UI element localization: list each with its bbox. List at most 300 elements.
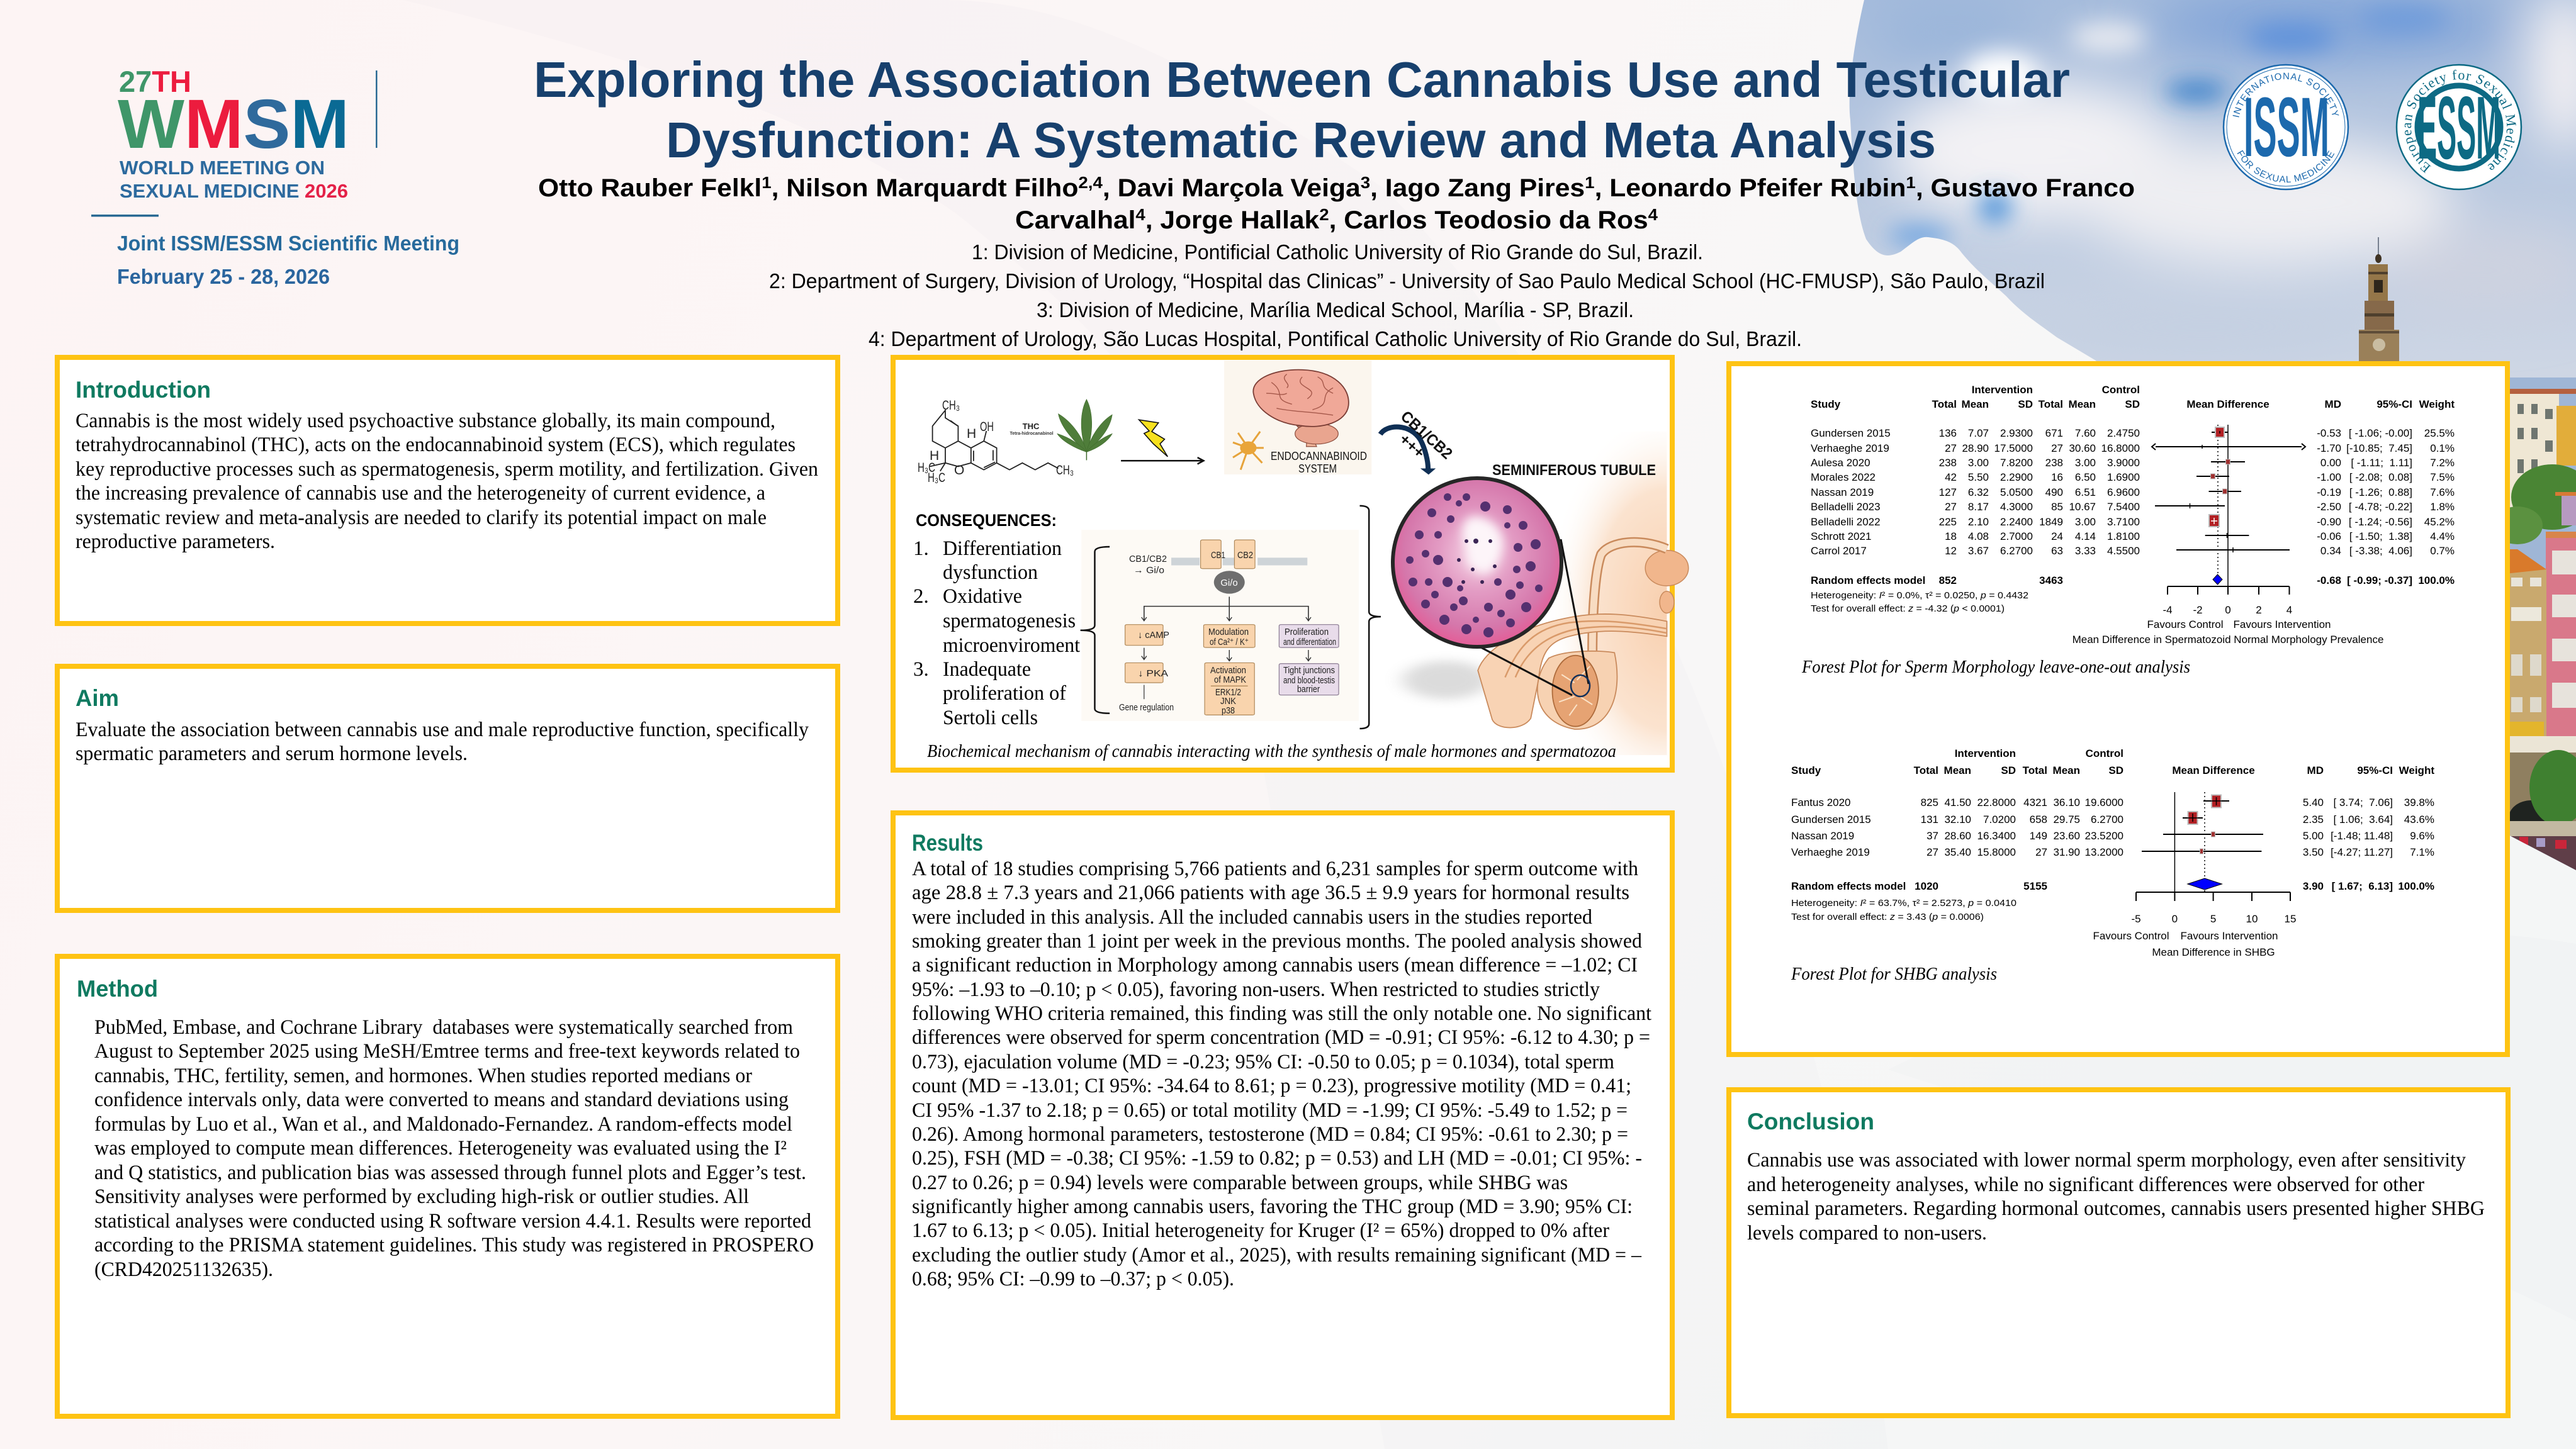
random effects summary: 100.0%	[2418, 574, 2455, 586]
table rows: [ 3.74; 7.06]	[2333, 797, 2393, 808]
THC label: THC	[1023, 422, 1040, 431]
table header: Mean	[2069, 398, 2096, 410]
micrograph: seminiferous tubule	[1393, 478, 1561, 647]
table rows: 30.60	[2069, 442, 2096, 454]
table rows: 2.4750	[2107, 427, 2140, 439]
THC label: Tetra-hidrocanabinol	[1010, 432, 1054, 436]
text block: method: according to the PRISMA statement guidelines. This study was registered in PROSPERO	[94, 1234, 814, 1256]
table rows: 17.5000	[1994, 442, 2033, 454]
text block: aim: spermatic parameters and serum hormone levels.	[76, 742, 468, 765]
text block: results: count (MD = -13.01; CI 95%: -34.64 to 8.61; p = 0.23), progressive motility (MD = 0.41;	[912, 1075, 1631, 1097]
signalling diagram: and differentiation	[1283, 637, 1336, 647]
table rows: 37	[1926, 830, 1938, 842]
text block: introduction: Cannabis is the most widely used psychoactive substance globally, its main compound,	[76, 410, 775, 432]
text block: results: 0.26). Among hormonal parameters, testosterone (MD = 0.84; CI 95%: -0.61 to 2.30; p =	[912, 1123, 1628, 1146]
table rows: 41.50	[1944, 797, 1971, 808]
panel: aim	[57, 666, 838, 910]
authors: 4	[1648, 205, 1658, 224]
signalling diagram: Proliferation	[1285, 627, 1329, 637]
table rows: 27	[2035, 846, 2047, 858]
authors: , Jorge Hallak	[1145, 206, 1320, 234]
table rows: 149	[2030, 830, 2047, 842]
signalling diagram: of MAPK	[1214, 674, 1246, 685]
arrow: CB1/CB2 curved: +++	[1396, 430, 1428, 462]
table rows: [ -1.26; 0.88]	[2349, 486, 2412, 498]
background photo: clock tower	[2359, 237, 2399, 361]
axis labels: Favours Intervention	[2181, 930, 2278, 942]
heading: introduction: Introduction	[76, 377, 211, 403]
table rows: 3.9000	[2107, 457, 2140, 469]
table rows: Morales 2022	[1811, 471, 1876, 483]
text block: results: 0.68; 95% CI: –0.99 to –0.37; p < 0.05).	[912, 1268, 1234, 1290]
table rows: Verhaeghe 2019	[1811, 442, 1889, 454]
table rows: 12	[1945, 545, 1957, 557]
table rows: 8.17	[1968, 501, 1989, 513]
table rows: 238	[2045, 457, 2063, 469]
table rows: 3.33	[2075, 545, 2096, 557]
text block: results: CI 95% -1.37 to 2.18; p = 0.65) or total motility (MD = -1.99; CI 95%: -5.49 to 1.52; p =	[912, 1099, 1628, 1122]
list: consequences: Differentiation	[943, 537, 1062, 560]
logo: ISSM: INTERNATIONAL SOCIETY	[2233, 73, 2339, 117]
table rows: 131	[1921, 814, 1938, 825]
axis labels: 2	[2256, 604, 2262, 616]
table rows: 4.5500	[2107, 545, 2140, 557]
table rows: 42	[1945, 471, 1957, 483]
arrow: CB1/CB2 curved	[1380, 408, 1456, 474]
random effects summary	[1811, 574, 2455, 586]
logo: ESSM: European Society for Sexual Medicine	[2404, 69, 2516, 174]
signalling diagram: CB1/CB2	[1129, 554, 1167, 564]
text block: results: significantly higher among cannabis users, favoring the THC group (MD = 3.90; 95% CI:	[912, 1195, 1633, 1218]
list: consequences: Sertoli cells	[943, 707, 1038, 729]
table header: Total	[2023, 764, 2047, 776]
table header: Mean	[2053, 764, 2080, 776]
table rows: 6.50	[2075, 471, 2096, 483]
text block: results: smoking greater than 1 joint per week in the previous months. The pooled analysis showed	[912, 930, 1642, 953]
random effects summary: -0.68	[2317, 574, 2341, 586]
text block: introduction: tetrahydrocannabinol (THC), acts on the endocannabinoid system (ECS), which regulates	[76, 434, 796, 456]
table header: 95%-CI	[2376, 398, 2412, 410]
text block: introduction	[76, 410, 818, 553]
table header: Mean Difference	[2186, 398, 2269, 410]
signalling diagram: Tight junctions	[1283, 665, 1335, 676]
table rows: 7.5400	[2107, 501, 2140, 513]
heading: method: Method	[77, 976, 158, 1002]
axis labels: 0	[2172, 913, 2178, 925]
table rows: 3.00	[1968, 457, 1989, 469]
list: consequences: dysfunction	[943, 561, 1038, 584]
random effects summary: 3.90	[2303, 880, 2324, 892]
random effects summary: 852	[1939, 574, 1957, 586]
table rows: 2.35	[2303, 814, 2324, 825]
table rows: [ 1.06; 3.64]	[2333, 814, 2393, 825]
table rows: 238	[1939, 457, 1957, 469]
table rows: [ -1.06; -0.00]	[2349, 427, 2412, 439]
logo: sexual medicine 2026: SEXUAL MEDICINE 2026	[120, 180, 348, 202]
table header: Control	[2086, 747, 2123, 759]
table header: Total	[1932, 398, 1957, 410]
text block: conclusion: Cannabis use was associated with lower normal sperm morphology, even after sensitivity	[1747, 1149, 2466, 1172]
chart: forest plot SHBG	[1791, 747, 2434, 958]
text block: conclusion	[1747, 1149, 2485, 1245]
table header: Control	[2102, 384, 2140, 396]
list: consequences: Inadequate	[943, 658, 1031, 681]
authors: 1	[1906, 173, 1916, 192]
list: consequences: 1.	[913, 537, 929, 560]
axis labels: Mean Difference in SHBG	[2152, 946, 2275, 958]
panel: results	[893, 813, 1672, 1418]
text block: method: Sensitivity analyses were performed by excluding high-risk or outlier studies. All	[94, 1185, 749, 1208]
text block: conclusion: and heterogeneity analyses, while no significant differences were observed for other	[1747, 1173, 2424, 1196]
table rows: 27	[1945, 442, 1957, 454]
random effects summary: [ 1.67; 6.13]	[2332, 880, 2393, 892]
table rows: 45.2%	[2424, 516, 2455, 528]
table rows: [-4.27; 11.27]	[2331, 846, 2393, 858]
logo: WMSM wordmark: WMSM	[118, 86, 349, 163]
table rows: 0.1%	[2430, 442, 2455, 454]
text block: results: following WHO criteria remained, this finding was still the only notable one. No significant	[912, 1002, 1651, 1025]
table rows: 7.0200	[1983, 814, 2016, 825]
text block: method: statistical analyses were conducted using R software version 4.4.1. Results were reported	[94, 1210, 811, 1233]
table rows: [-10.85; 7.45]	[2346, 442, 2412, 454]
table rows: 7.6%	[2430, 486, 2455, 498]
text block: results: 0.73), ejaculation volume (MD = -0.23; 95% CI: -0.50 to 0.05; p = 0.1034), total sperm	[912, 1051, 1614, 1073]
table rows: 15.8000	[1977, 846, 2016, 858]
table rows: -1.70	[2317, 442, 2341, 454]
signalling diagram	[1081, 506, 1381, 729]
table rows: 16	[2051, 471, 2063, 483]
arrow: CB1/CB2 curved: CB1/CB2	[1397, 408, 1456, 462]
icon: lightning bolt	[1139, 420, 1167, 457]
authors: Otto Rauber Felkl	[538, 174, 748, 202]
table header: 95%-CI	[2357, 764, 2393, 776]
text block: results: were included in this analysis. All the included cannabis users in the studies reported	[912, 906, 1592, 929]
affiliations: 3: Division of Medicine, Marília Medical School, Marília - SP, Brazil.	[1037, 298, 1634, 322]
axis labels: Favours Intervention	[2234, 618, 2331, 630]
table rows: -0.53	[2317, 427, 2341, 439]
table rows: Schrott 2021	[1811, 530, 1871, 542]
table rows: 7.07	[1968, 427, 1989, 439]
background photo: Porto buildings	[2510, 378, 2576, 870]
text block: method: PubMed, Embase, and Cochrane Library databases were systematically searched from	[94, 1016, 793, 1039]
table rows: 6.32	[1968, 486, 1989, 498]
table rows: 2.2400	[2000, 516, 2033, 528]
icon: THC molecule: H	[967, 427, 976, 441]
table rows: 5.0500	[2000, 486, 2033, 498]
table rows: [-1.48; 11.48]	[2331, 830, 2393, 842]
table rows: 32.10	[1944, 814, 1971, 825]
table rows: 6.2700	[2000, 545, 2033, 557]
panel: method	[57, 956, 838, 1416]
text block: method: August to September 2025 using MeSH/Emtree terms and free-text keywords related to	[94, 1040, 800, 1063]
text block: results: 0.25), FSH (MD = -0.38; CI 95%: -1.59 to 0.82; p = 0.53) and LH (MD = -0.01; CI 95%: -	[912, 1147, 1642, 1170]
random effects summary: [ -0.99; -0.37]	[2347, 574, 2412, 586]
icon: THC molecule: O	[954, 463, 964, 478]
list: consequences	[913, 537, 1080, 729]
table rows: Nassan 2019	[1791, 830, 1854, 842]
table header: MD	[2325, 398, 2341, 410]
list: consequences: microenviroment	[943, 634, 1080, 657]
icon: THC molecule: H	[930, 449, 939, 463]
signalling diagram: barrier	[1297, 684, 1320, 695]
table header: SD	[2001, 764, 2016, 776]
table header: Total	[2039, 398, 2063, 410]
table rows: 3.67	[1968, 545, 1989, 557]
table rows: 1.8100	[2107, 530, 2140, 542]
icon: THC molecule: H₃C	[928, 471, 945, 485]
signalling diagram: ↓ cAMP	[1138, 630, 1169, 641]
table rows: 27	[1945, 501, 1957, 513]
signalling diagram: Activation	[1210, 665, 1246, 676]
axis labels: -4	[2163, 604, 2173, 616]
table rows: 127	[1939, 486, 1957, 498]
signalling diagram: p38	[1222, 705, 1235, 716]
signalling diagram: ERK1/2	[1215, 687, 1241, 698]
table header	[1811, 384, 2455, 410]
text block: method: formulas by Luo et al., Wan et al., and Maldonado-Fernandez. A random-effects model	[94, 1113, 792, 1136]
icon: THC molecule	[918, 398, 1074, 485]
axis labels: -5	[2131, 913, 2141, 925]
icon: brain and neuron: SYSTEM	[1298, 462, 1337, 475]
text block: results: differences were observed for sperm concentration (MD = -0.91; CI 95%: -6.12 to 4.30; p =	[912, 1026, 1650, 1049]
table rows: 85	[2051, 501, 2063, 513]
table rows: [ -1.11; 1.11]	[2351, 457, 2412, 469]
heading: consequences: CONSEQUENCES:	[916, 511, 1057, 530]
table rows: -2.50	[2317, 501, 2341, 513]
table rows: 9.6%	[2410, 830, 2434, 842]
table rows: 6.9600	[2107, 486, 2140, 498]
heterogeneity statistics	[1811, 590, 2028, 614]
logo: rule	[91, 215, 159, 216]
text block: method: was employed to compute mean differences. Heterogeneity was evaluated using the I²	[94, 1137, 787, 1160]
axis labels: Mean Difference in Spermatozoid Normal Morphology Prevalence	[2073, 634, 2383, 646]
table rows	[1791, 797, 2434, 858]
plot marks	[2152, 425, 2305, 595]
table rows: 23.5200	[2085, 830, 2123, 842]
table rows: -0.90	[2317, 516, 2341, 528]
list: consequences: 3.	[913, 658, 929, 681]
table rows: Verhaeghe 2019	[1791, 846, 1870, 858]
table rows: 7.2%	[2430, 457, 2455, 469]
table header	[1791, 747, 2434, 776]
table header: SD	[2018, 398, 2033, 410]
table rows: 4.3000	[2000, 501, 2033, 513]
authors: , Carlos Teodosio da Ros	[1329, 206, 1648, 234]
table header: Intervention	[1972, 384, 2033, 396]
table rows: 3.50	[2303, 846, 2324, 858]
table rows: 2.9300	[2000, 427, 2033, 439]
title	[534, 52, 2070, 168]
table rows: 490	[2045, 486, 2063, 498]
text block: method: (CRD420251132635).	[94, 1258, 273, 1281]
axis labels: Favours Control	[2093, 930, 2169, 942]
table rows: 1.8%	[2430, 501, 2455, 513]
table rows: 35.40	[1944, 846, 1971, 858]
heterogeneity statistics: Heterogeneity: I² = 0.0%, τ² = 0.0250, p = 0.4432	[1811, 590, 2028, 601]
signalling diagram: CB1	[1211, 550, 1225, 561]
axis labels	[2093, 913, 2296, 958]
illustration: testis anatomy	[1402, 432, 1689, 755]
heterogeneity statistics: Test for overall effect: z = 3.43 ( p = 0.0006)	[1791, 912, 1984, 922]
logo: 27TH: 27TH	[119, 65, 191, 98]
table header: SD	[2108, 764, 2123, 776]
table rows: 0.00	[2320, 457, 2341, 469]
table rows: 5.50	[1968, 471, 1989, 483]
list: consequences: Oxidative	[943, 585, 1022, 608]
table rows: Carrol 2017	[1811, 545, 1867, 557]
chart: forest plot sperm morphology	[1811, 384, 2455, 646]
authors: 1	[1585, 173, 1595, 192]
authors: 3	[1361, 173, 1370, 192]
caption: sperm morphology plot: Forest Plot for Sperm Morphology leave-one-out analysis	[1801, 657, 2190, 677]
joint meeting line: Joint ISSM/ESSM Scientific Meeting	[117, 232, 459, 255]
table rows: 27	[2051, 442, 2063, 454]
table rows: Belladelli 2022	[1811, 516, 1881, 528]
table rows: 4321	[2023, 797, 2047, 808]
logo: divider	[376, 70, 378, 148]
text block: aim	[76, 719, 809, 765]
axis labels: 4	[2286, 604, 2292, 616]
table rows: [ -2.08; 0.08]	[2349, 471, 2412, 483]
table rows: 25.5%	[2424, 427, 2455, 439]
text block: results: A total of 18 studies comprising 5,766 patients and 6,231 samples for sperm outcome with	[912, 858, 1638, 880]
table rows: 5.40	[2303, 797, 2324, 808]
caption: SHBG plot: Forest Plot for SHBG analysis	[1791, 964, 1997, 984]
table rows: 23.60	[2053, 830, 2080, 842]
table rows: 43.6%	[2404, 814, 2434, 825]
table rows: Gundersen 2015	[1811, 427, 1891, 439]
caption: mechanism figure: Biochemical mechanism of cannabis interacting with the synthesis of male hormones and spermatozoa	[927, 741, 1616, 761]
table rows: 2.2900	[2000, 471, 2033, 483]
table header: SD	[2125, 398, 2140, 410]
panel: forest plots	[1729, 364, 2507, 1055]
table header: Study	[1811, 398, 1841, 410]
signalling diagram: → Gi/o	[1133, 565, 1164, 576]
text block: introduction: key reproductive processes such as spermatogenesis, sperm motility, and fertilization. Given	[76, 458, 818, 481]
authors: , Iago Zang Pires	[1370, 174, 1585, 202]
icon: brain and neuron	[1224, 361, 1371, 475]
table rows: 3.7100	[2107, 516, 2140, 528]
authors: Carvalhal	[1015, 206, 1128, 234]
meeting date: February 25 - 28, 2026	[117, 265, 330, 288]
text block: method: cannabis, THC, fertility, semen, and hormones. When studies reported medians or	[94, 1065, 752, 1087]
table rows: 1.6900	[2107, 471, 2140, 483]
authors	[538, 173, 2135, 234]
table rows: 16.3400	[1977, 830, 2016, 842]
table rows: 22.8000	[1977, 797, 2016, 808]
table rows: -0.19	[2317, 486, 2341, 498]
heterogeneity statistics	[1791, 898, 2016, 922]
table header: Study	[1791, 764, 1821, 776]
authors: 2,4	[1078, 173, 1103, 192]
heading: aim: Aim	[76, 685, 119, 711]
heterogeneity statistics: Heterogeneity: I² = 63.7%, τ² = 2.5273, p = 0.0410	[1791, 898, 2016, 909]
authors: , Nilson Marquardt Filho	[772, 174, 1078, 202]
table header: Weight	[2399, 764, 2434, 776]
signalling diagram: Gene regulation	[1119, 702, 1174, 713]
signalling diagram: Gi/o	[1220, 578, 1238, 588]
axis labels: Favours Control	[2147, 618, 2223, 630]
table rows: 5.00	[2303, 830, 2324, 842]
conference logo: 27th WMSM	[91, 65, 459, 288]
table rows: 31.90	[2053, 846, 2080, 858]
table rows: 6.2700	[2091, 814, 2123, 825]
text block: results	[912, 858, 1651, 1290]
table rows: 2.10	[1968, 516, 1989, 528]
authors: , Davi Marçola Veiga	[1103, 174, 1361, 202]
plot marks	[2136, 792, 2290, 901]
signalling diagram: ↓ PKA	[1138, 668, 1168, 679]
background photo: cloudy sky	[1825, 0, 2576, 881]
list: consequences: spermatogenesis	[943, 610, 1076, 632]
affiliations: 2: Department of Surgery, Division of Urology, “Hospital das Clinicas” - University of Sao Paulo Medical School (HC-FMUSP), São Paulo, Brazil	[769, 269, 2045, 293]
text block: results: 0.27 to 0.26; p = 0.94) levels were comparable between groups, while SHBG was	[912, 1172, 1568, 1194]
random effects summary	[1791, 880, 2434, 892]
table rows: 1849	[2039, 516, 2063, 528]
table rows: [ -1.24; -0.56]	[2349, 516, 2412, 528]
axis labels: 0	[2225, 604, 2231, 616]
table header: Weight	[2419, 398, 2455, 410]
THC label	[1010, 422, 1054, 436]
icon: THC molecule: H₃C	[918, 461, 935, 475]
table rows: 0.7%	[2430, 545, 2455, 557]
table rows: 63	[2051, 545, 2063, 557]
table rows: [ -4.78; -0.22]	[2349, 501, 2412, 513]
table header: Total	[1914, 764, 1938, 776]
authors: , Gustavo Franco	[1916, 174, 2135, 202]
axis labels: 15	[2285, 913, 2296, 925]
title: Dysfunction: A Systematic Review and Meta Analysis	[666, 112, 1936, 168]
icon: brain and neuron: ENDOCANNABINOID	[1271, 450, 1367, 462]
text block: introduction: reproductive parameters.	[76, 530, 275, 553]
heading: conclusion: Conclusion	[1747, 1109, 1874, 1134]
authors: 4	[1135, 205, 1145, 224]
axis labels	[2073, 604, 2383, 646]
axis labels: -2	[2193, 604, 2203, 616]
text block: aim: Evaluate the association between cannabis use and male reproductive function, specifically	[76, 719, 809, 741]
text block: introduction: systematic review and meta-analysis are needed to clarify its potential impact on male	[76, 506, 767, 529]
callout: magnification lines	[1481, 539, 1589, 695]
random effects summary: 1020	[1915, 880, 1938, 892]
table rows: 0.34	[2320, 545, 2341, 557]
affiliations: 4: Department of Urology, São Lucas Hospital, Pontifical Catholic University of Rio Grande do Sul, Brazil.	[869, 327, 1802, 350]
signalling diagram: and blood-testis	[1283, 675, 1335, 686]
table rows: Fantus 2020	[1791, 797, 1851, 808]
table header: Mean	[1962, 398, 1989, 410]
authors: , Leonardo Pfeifer Rubin	[1595, 174, 1906, 202]
icon: cannabis leaf	[1057, 400, 1112, 460]
heading: results: Results	[912, 830, 983, 856]
table rows: 3.00	[2075, 516, 2096, 528]
table rows: 225	[1939, 516, 1957, 528]
title: Exploring the Association Between Cannabis Use and Testicular	[534, 52, 2070, 108]
table header: Mean	[1944, 764, 1971, 776]
table rows: 13.2000	[2085, 846, 2123, 858]
table rows: 3.00	[2075, 457, 2096, 469]
signalling diagram: JNK	[1220, 696, 1236, 707]
signalling diagram: of Ca²⁺ / K⁺	[1210, 637, 1249, 647]
table rows: 19.6000	[2085, 797, 2123, 808]
table rows: 671	[2045, 427, 2063, 439]
random effects summary: 5155	[2023, 880, 2047, 892]
table rows: 36.10	[2053, 797, 2080, 808]
authors: 1	[762, 173, 772, 192]
random effects summary: 3463	[2039, 574, 2063, 586]
table rows: 16.8000	[2101, 442, 2140, 454]
text block: introduction: the increasing prevalence of cannabis use and the heterogeneity of current evidence, a	[76, 482, 765, 505]
table rows: 7.5%	[2430, 471, 2455, 483]
table rows: Nassan 2019	[1811, 486, 1874, 498]
